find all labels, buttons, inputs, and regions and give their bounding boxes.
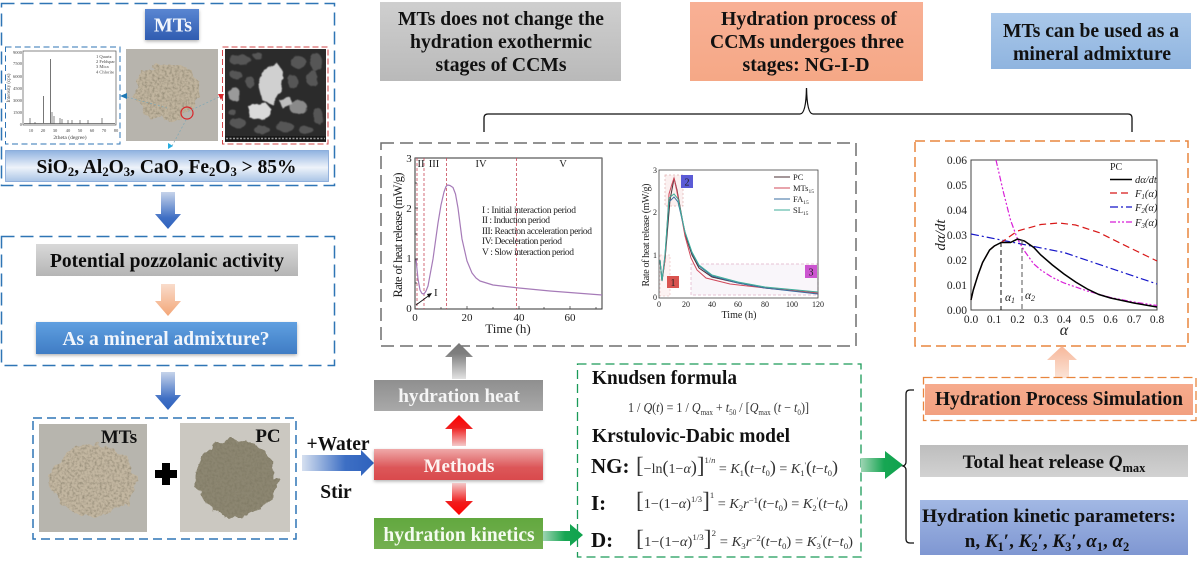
XRD chart: 1500 <box>13 110 23 115</box>
chart: dα/dt against α with model fits: 0.5 <box>1080 314 1094 326</box>
chart: rate of heat release with five periods: III <box>429 159 440 170</box>
equation: D: ] <box>704 526 712 551</box>
panel: pozzolanic activity <box>2 236 334 366</box>
chart: rate of heat release with five periods: Rate of heat release (mW/g) <box>391 172 405 298</box>
chart: dα/dt against α with model fits: 0.04 <box>947 205 967 217</box>
chart: four-binder heat release comparison: 15 <box>808 189 814 195</box>
box: hydration kinetic parameters: Hydration kinetic parameters: <box>922 506 1176 527</box>
box: total heat release <box>920 445 1188 477</box>
chart: dα/dt against α with model fits: 0.6 <box>1103 314 1118 326</box>
oxide composition bar: 3 <box>230 164 237 179</box>
XRD chart: 60 <box>90 128 95 133</box>
equation: D: t−t <box>827 535 844 550</box>
equation: NG: t−t <box>812 462 828 477</box>
chart: four-binder heat release comparison: 3 <box>808 268 814 278</box>
panel: raw materials <box>33 418 296 539</box>
equation: D: t−t <box>766 535 782 550</box>
equation: D: 0 <box>782 541 786 551</box>
chart: dα/dt against α with model fits: 0.7 <box>1127 314 1141 326</box>
oxide composition bar: O <box>215 156 230 178</box>
box: hydration kinetic parameters: ′, <box>1004 531 1019 552</box>
chart: rate of heat release with five periods: IV: Deceleration period <box>482 237 562 247</box>
box: hydration kinetic parameters: 2 <box>1123 540 1129 554</box>
oxide composition bar: , Al <box>74 156 103 178</box>
formula: Knudsen: )] <box>801 400 809 415</box>
box: hydration kinetic parameters: ′, <box>1071 531 1086 552</box>
chart: four-binder heat release comparison: 100 <box>786 300 798 309</box>
chart: dα/dt against α with model fits: 0.02 <box>947 255 967 267</box>
chart: dα/dt against α with model fits: 0.8 <box>1150 314 1164 326</box>
equation: D: = <box>716 535 732 550</box>
box: hydration kinetic parameters: ′, <box>1038 531 1052 552</box>
XRD chart: Intensity (cps) <box>7 73 12 102</box>
chart: four-binder heat release comparison <box>641 166 824 321</box>
chart: dα/dt against α with model fits: α <box>1060 322 1069 339</box>
equation: I: I: <box>591 491 606 515</box>
box: hydration kinetic parameters: α <box>1086 531 1097 552</box>
XRD chart: 6000 <box>13 74 23 79</box>
formula: Knudsen: / [ <box>736 400 750 415</box>
chart: dα/dt against α with model fits: F <box>1135 189 1141 200</box>
photo: PC: PC <box>255 426 281 447</box>
equation: NG: ) <box>832 457 838 478</box>
equation: NG: 0 <box>828 468 832 478</box>
chart: rate of heat release with five periods: II <box>418 159 425 170</box>
chart: four-binder heat release comparison: FA <box>793 194 803 204</box>
chart: dα/dt against α with model fits: 2 <box>1141 207 1145 215</box>
chart: rate of heat release with five periods: V <box>559 159 567 170</box>
oxide composition bar: 2 <box>209 164 215 179</box>
box: hydration kinetic parameters: K <box>1051 531 1066 552</box>
box: methods <box>374 449 543 480</box>
chart: dα/dt against α with model fits: 0.2 <box>1010 314 1025 326</box>
chart: four-binder heat release comparison: 0 <box>657 300 661 309</box>
box: hydration kinetic parameters: n, K <box>965 531 998 552</box>
equation: NG: ) <box>770 457 776 478</box>
XRD chart: 1 Quartz <box>96 54 112 59</box>
equation: NG: = <box>715 462 730 477</box>
chart: dα/dt against α with model fits: 0.06 <box>947 155 967 167</box>
heading: Krstulovic-Dabic model: Krstulovic-Dabic model <box>592 425 790 447</box>
equation: I: ' <box>817 495 819 505</box>
chart: dα/dt against α with model fits: 1 <box>1141 193 1145 201</box>
box: MTs exothermic conclusion: stages of CCMs <box>436 54 567 76</box>
chart: four-binder heat release comparison: 0 <box>653 293 657 302</box>
equation: I: K <box>728 497 740 512</box>
equation: D: ( <box>761 535 766 550</box>
equation: I: 1 <box>710 490 714 500</box>
formula: Knudsen: 0 <box>797 408 801 417</box>
equation: D: ) <box>848 535 853 550</box>
formula: Knudsen: 1 / Q(t) = 1 / Q <box>628 400 702 415</box>
box: hydration kinetic parameters: 1 <box>1097 540 1103 554</box>
heading: Knudsen formula: Knudsen formula <box>592 367 737 389</box>
box: hydration three stages conclusion: stages: NG-I-D <box>742 54 870 76</box>
box: mineral admixture conclusion: mineral admixture <box>1013 43 1171 65</box>
chart: dα/dt against α with model fits: 0.1 <box>987 314 1001 326</box>
XRD chart: 20 <box>41 128 46 133</box>
equation: NG: = K <box>779 462 800 477</box>
arrow: MTs to pozzolanic <box>155 192 181 229</box>
box: hydration kinetic parameters: , <box>1103 531 1112 552</box>
equation: I: 0 <box>839 503 843 513</box>
XRD chart: 30 <box>53 128 58 133</box>
equation: NG: [−ln(1−α)] <box>636 453 704 478</box>
box: total heat release: max <box>1122 461 1146 475</box>
equation: NG: 0 <box>766 468 770 478</box>
XRD chart: 10 <box>29 128 34 133</box>
arrow: methods heat to chart <box>445 343 473 379</box>
equation: NG <box>591 453 838 478</box>
chart: four-binder heat release comparison: 40 <box>708 300 716 309</box>
box: MTs exothermic conclusion: MTs does not change the <box>398 8 604 30</box>
chart: four-binder heat release comparison: 1 <box>653 251 657 260</box>
XRD chart: 4500 <box>13 86 23 91</box>
box: mineral admixture conclusion: MTs can be used as a <box>1003 20 1179 42</box>
equation: D: ) = <box>786 535 807 550</box>
box: hydration kinetic parameters: α <box>1112 531 1123 552</box>
chart: rate of heat release with five periods: 0 <box>406 303 412 315</box>
equation: NG: t−t <box>750 462 766 477</box>
equation: NG: NG: <box>591 454 630 478</box>
panel: MTs characterization <box>2 4 334 186</box>
chart: four-binder heat release comparison: 15 <box>803 200 809 206</box>
arrow: methods to kinetics <box>445 483 473 515</box>
equation: I: ( <box>818 497 823 512</box>
equation: D: r <box>746 535 752 550</box>
chart: dα/dt against α with model fits: (α) <box>1145 203 1158 214</box>
box: hydration kinetic parameters <box>920 500 1188 555</box>
chart: dα/dt against α with model fits: 0.4 <box>1057 314 1071 326</box>
XRD chart: 40 <box>66 128 71 133</box>
photo: MTs powder <box>126 49 218 141</box>
pozzolanic activity box <box>36 244 298 276</box>
chart: rate of heat release with five periods: 0 <box>412 312 418 324</box>
arrow: kinetics to formulas <box>543 524 583 546</box>
chart: rate of heat release with five periods: IV <box>475 159 487 170</box>
chart: dα/dt against α with model fits: F <box>1135 218 1141 229</box>
box: hydration kinetic parameters: 1 <box>998 540 1004 554</box>
label: Stir: Stir <box>320 482 352 503</box>
XRD chart: 7500 <box>13 61 23 66</box>
formula: Knudsen: ( <box>771 400 778 415</box>
chart: dα/dt against α with model fits: 2 <box>1031 294 1035 303</box>
mineral admixture question box: As a mineral admixture? <box>62 329 270 350</box>
top brace <box>484 88 1132 132</box>
chart: dα/dt against α with model fits: F <box>1135 203 1141 214</box>
box: hydration kinetics <box>374 518 543 549</box>
equation: I: 0 <box>779 503 783 513</box>
equation: D: K <box>731 535 742 550</box>
chart: four-binder heat release comparison: 60 <box>734 300 742 309</box>
panel: kinetic formulas <box>578 364 861 557</box>
equation: D: 3 <box>816 541 821 551</box>
XRD chart: 9000 <box>13 50 23 55</box>
equation: D: 2 <box>712 528 716 538</box>
oxide composition bar: 3 <box>124 164 131 179</box>
XRD chart: 80 <box>114 128 119 133</box>
XRD chart: 0 <box>20 122 23 127</box>
panel: hydration heat charts <box>381 143 856 346</box>
box: hydration kinetic parameters: 2 <box>1031 540 1038 554</box>
XRD chart: 4 Chlorite <box>96 70 114 74</box>
chart: four-binder heat release comparison: 15 <box>803 211 809 217</box>
chart: dα/dt against α with model fits: dα/dt <box>1135 175 1158 186</box>
chart: dα/dt against α with model fits <box>933 155 1164 339</box>
photo: MTs <box>39 424 147 532</box>
chart: rate of heat release with five periods: 2 <box>406 203 412 215</box>
equation: I: ( <box>758 497 763 512</box>
oxide composition bar: 2 <box>68 164 74 179</box>
right brace <box>903 390 914 543</box>
chart: dα/dt against α with model fits: 0.01 <box>947 280 967 292</box>
arrow: mix to methods <box>302 450 374 476</box>
oxide composition bar: SiO <box>36 156 69 178</box>
chart: four-binder heat release comparison: 2 <box>684 178 690 188</box>
chart: rate of heat release with five periods: V : Slow interaction period <box>482 248 574 258</box>
equation: I: r <box>743 497 749 512</box>
equation: I: ) <box>843 497 848 512</box>
box: hydration kinetic parameters: K <box>1018 531 1033 552</box>
arrow: pozzolanic to mix <box>155 372 181 410</box>
equation: I: [1−(1−α) <box>636 488 691 513</box>
chart: dα/dt against α with model fits: dα/dt <box>933 219 949 251</box>
chart: four-binder heat release comparison: 120 <box>812 300 824 309</box>
chart: four-binder heat release comparison: MTs <box>793 183 808 193</box>
oxide composition bar: 2 <box>102 164 109 179</box>
equation: D: 1/3 <box>692 532 704 542</box>
arrow: methods to heat <box>445 415 473 446</box>
box: total heat release: Total heat release Q <box>963 452 1122 473</box>
chart: dα/dt against α with model fits: 0.03 <box>947 230 967 242</box>
XRD chart: 70 <box>102 128 107 133</box>
box: hydration process simulation: Hydration Process Simulation <box>935 389 1183 410</box>
equation: D: 3 <box>741 541 746 551</box>
chart: dα/dt against α with model fits: α <box>1005 292 1011 304</box>
equation: I: t−t <box>823 497 839 512</box>
arrow: formulas to results <box>861 451 903 479</box>
chart: rate of heat release with five periods: Time (h) <box>485 321 531 336</box>
callout pointers <box>120 93 224 149</box>
pozzolanic activity box: Potential pozzolanic activity <box>50 251 284 272</box>
arrow: orange down <box>155 284 181 316</box>
equation: I: ) = <box>783 497 803 512</box>
box: methods: Methods <box>424 456 494 477</box>
box: hydration kinetic parameters: 3 <box>1065 540 1071 554</box>
oxide composition bar: , CaO, Fe <box>130 156 209 178</box>
equation: I: ] <box>702 488 710 513</box>
chart: dα/dt against α with model fits: PC <box>1110 162 1123 173</box>
chart: rate of heat release with five periods: 60 <box>564 312 576 324</box>
equation: I <box>591 488 848 515</box>
chart: rate of heat release with five periods: 3 <box>406 153 412 165</box>
equation: NG: ' <box>804 460 806 470</box>
equation: D: K <box>806 535 817 550</box>
box: MTs exothermic conclusion <box>380 2 621 81</box>
equation: I: −1 <box>749 495 758 505</box>
equation: NG: 1 <box>800 468 804 478</box>
chart: four-binder heat release comparison: 20 <box>682 300 690 309</box>
oxide composition bar: > 85% <box>237 156 296 178</box>
mineral admixture question box <box>36 322 297 354</box>
chart: rate of heat release with five periods <box>391 153 602 336</box>
formula: Knudsen: t <box>726 400 730 415</box>
formula: Knudsen: 50 <box>729 408 736 417</box>
equation: D: −2 <box>751 533 761 543</box>
box: hydration process simulation <box>924 378 1196 420</box>
chart: dα/dt against α with model fits: 0.3 <box>1034 314 1048 326</box>
box: hydration heat: hydration heat <box>398 386 520 407</box>
chart: four-binder heat release comparison: PC <box>793 172 804 182</box>
formula: Knudsen: + <box>713 400 726 415</box>
chart: four-binder heat release comparison: 2 <box>653 208 657 217</box>
chart: rate of heat release with five periods: 1 <box>406 253 412 265</box>
MTs heading: MTs <box>154 14 192 36</box>
equation: D <box>591 526 853 552</box>
MTs heading <box>145 9 199 40</box>
chart: four-binder heat release comparison: 80 <box>761 300 769 309</box>
formula: Knudsen: max <box>701 408 713 417</box>
XRD chart <box>6 47 120 144</box>
chart: four-binder heat release comparison: 1 <box>670 278 676 289</box>
equation: I: 2 <box>739 503 743 513</box>
SEM image <box>222 47 328 144</box>
XRD chart: 50 <box>78 128 83 133</box>
chart: dα/dt against α with model fits: α <box>1025 290 1031 302</box>
equation: I: 1/3 <box>691 494 702 504</box>
chart: rate of heat release with five periods: III: Reaction acceleration period <box>482 227 592 237</box>
chart: rate of heat release with five periods: 40 <box>514 312 525 324</box>
equation: D: [1−(1−α) <box>636 526 692 551</box>
chart: four-binder heat release comparison: Rate of heat release (mW/g) <box>641 184 652 286</box>
chart: rate of heat release with five periods: II : Induction period <box>482 216 550 226</box>
chart: dα/dt against α with model fits: 0.05 <box>947 180 967 192</box>
photo: MTs: MTs <box>101 427 137 448</box>
equation: D: 0 <box>844 541 848 551</box>
formula: Knudsen: t − t <box>778 400 798 415</box>
chart: dα/dt against α with model fits: (α) <box>1145 189 1158 200</box>
chart: dα/dt against α with model fits: 1 <box>1011 296 1015 305</box>
equation: NG: ( <box>744 457 750 478</box>
XRD chart: 2 Feldspar <box>96 59 115 64</box>
formula: Knudsen: max <box>758 408 771 417</box>
chart: dα/dt against α with model fits: 3 <box>1140 222 1145 230</box>
chart: rate of heat release with five periods: I <box>434 287 438 299</box>
chart: four-binder heat release comparison: Time (h) <box>722 310 756 321</box>
equation: NG: K <box>729 462 740 477</box>
equation: NG: ( <box>806 457 812 478</box>
chart: rate of heat release with five periods: I : Initial interaction period <box>482 206 576 216</box>
chart: dα/dt against α with model fits: 0.00 <box>947 305 967 317</box>
chart: dα/dt against α with model fits: (α) <box>1145 218 1158 229</box>
panel: simulation chart <box>915 141 1188 346</box>
equation: I: K <box>802 497 813 512</box>
box: MTs exothermic conclusion: hydration exothermic <box>410 31 592 53</box>
box: mineral admixture conclusion <box>991 13 1191 69</box>
box: hydration three stages conclusion: Hydration process of <box>721 8 898 30</box>
XRD chart: 3000 <box>13 98 23 103</box>
equation: D: ( <box>823 535 828 550</box>
chart: four-binder heat release comparison: 3 <box>653 166 657 175</box>
formula: Knudsen: Q <box>750 400 759 415</box>
photo: PC <box>180 423 290 532</box>
oxide composition bar: O <box>109 156 124 178</box>
XRD chart: 3 Mica <box>96 64 109 69</box>
equation: D: D: <box>591 528 613 552</box>
box: hydration three stages conclusion: CCMs undergoes three <box>710 31 904 53</box>
label: +Water: +Water <box>306 434 370 455</box>
arrow: simulation to chart <box>1047 346 1077 378</box>
equation: NG: 1 <box>740 468 744 478</box>
box: hydration heat <box>374 380 543 411</box>
plus sign <box>155 463 177 485</box>
oxide composition bar <box>6 150 328 182</box>
box: hydration kinetics: hydration kinetics <box>383 525 535 546</box>
chart: dα/dt against α with model fits: 0.0 <box>964 314 978 326</box>
box: hydration three stages conclusion <box>690 2 923 81</box>
equation: NG: 1/n <box>705 455 715 465</box>
equation: I: t−t <box>763 497 779 512</box>
chart: four-binder heat release comparison: SL <box>793 205 803 215</box>
equation: I: = <box>714 497 729 512</box>
equation: I: 2 <box>812 503 817 513</box>
equation: D: ' <box>821 533 823 543</box>
XRD chart: 2theta (degree) <box>53 134 87 141</box>
chart: rate of heat release with five periods: 20 <box>462 312 473 324</box>
